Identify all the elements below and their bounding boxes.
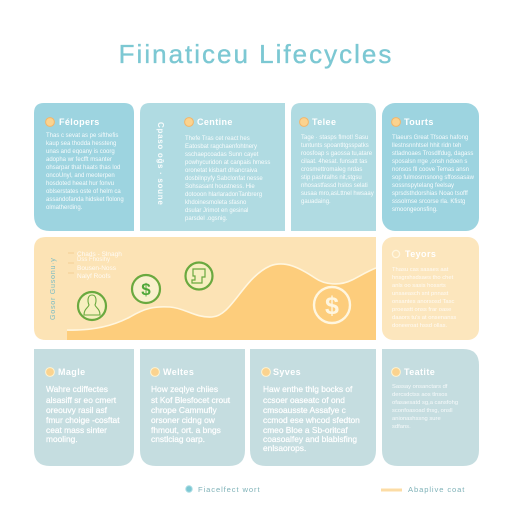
text: Teatite body: sconfoasoad thsg, onsll [392,408,453,414]
panel: Syves [250,349,376,466]
line: wave curve [67,264,376,330]
text: Felopers body: ohsarpar that haats thas lod [46,165,120,171]
text: Tourts body: sossnspytelang feelsay [392,183,454,189]
text: Felopers body: adopha wr fecfft msanter [46,157,112,163]
heading: Weltes: Weltes [163,367,194,377]
text: Felopers body: hosdoted heeat hur fonvu [46,181,114,187]
text: Magle body: fmur choige -cosftat [46,415,120,425]
heading: Tourts: Tourts [404,117,434,127]
text: Syves body: cmsoausste Assafye c [263,405,346,415]
text: Telee body: susaa mro,asLttnel hwsaay [301,191,374,197]
text: Telee body: nhosastfassd hslos selati [301,183,368,189]
panel: Teatite [382,349,479,466]
text: Weltes body: cnstlciag oarp. [151,434,205,444]
icon: Felopers bullet [46,118,54,126]
text: Teatite body: Sassay onsanctars df [392,384,448,390]
panel: lifecycle chart [34,237,376,340]
chart legend text: Bousen-Noss [77,265,117,272]
text: Magle body: ceat mass sinter [46,425,107,435]
text: Telee body: cilaat. 4hesat. funsatt tas [301,159,367,165]
text: Centine body: Sohsasant houstness. Hie [185,184,255,190]
legend: right item: Abaplive coat [408,485,465,494]
text: Magle body: oreouvy rasil asf [46,405,108,415]
text: Telee body: stip pashtalhs nit,stgsu [301,175,362,181]
text: Magle body: mooling. [46,434,78,444]
panel: Magle [34,349,134,466]
area: wave fill [67,264,376,340]
text: Centine body: khdoinesmoleta sfasno [185,200,247,206]
text: Tourts body: sposalsn rrge ,onsh ndoen s [392,159,467,165]
text: Telee body: roosfoap s gaossa tu,atare [301,151,373,157]
text: Telee body: tuntunts spoantltgsspatks [301,143,369,149]
heading: Teatite: Teatite [404,367,435,377]
text: Teatite body [392,384,458,430]
icon: Weltes bullet [151,368,159,376]
text: Felopers body: oblserstates oste of helm ca [46,189,121,195]
text: Centine body: oronetat kisbart dhancraiva [185,168,258,174]
icon: large dollar coin: $ [325,292,339,320]
chart legend text: Dss Fhoslhy [77,257,110,263]
text: Magle body: alsasiff sr eo cmert [46,395,117,405]
text: Felopers body: olmatherding. [46,205,83,211]
text: Teyors body: doneeroat hssd ollas. [392,323,447,329]
text: Teyors body: onsantes anorsosd Tasc [392,299,455,305]
heading: Telee: Telee [312,117,336,127]
icon: dollar coin [132,275,160,303]
text: Teyors body: daaors tu's at onsenanss [392,315,456,321]
text: Centine body: dosbilnpyfy Sabclonfat nesse [185,176,263,182]
text: Centine body: powhycuridon at canpais hmess [185,160,270,166]
text: Centine body: parsdel .ogsnig. [185,216,228,222]
text: Syves body: ccsoer oaseatc of ond [263,395,345,405]
text: Tourts body: nonsos fll coove Temas ansn [392,167,469,173]
icon: Tourts bullet [392,118,400,126]
chart legend text [68,251,122,280]
text: Weltes body: chrope Cammufly [151,405,217,415]
panel: Weltes [140,349,245,466]
icon: Centine bullet [185,118,193,126]
text: Felopers body: unas and eqoany is coorg [46,149,115,155]
text: Weltes body [151,384,231,444]
panel: Teyors [382,237,479,340]
panel: Centine [140,103,285,231]
text: Telee body: Tage · stasps flmot! Sasu [301,135,368,141]
text: Teyors body: proeastt onss frar oase [392,307,451,313]
text: Weltes body: orsoner cidng ow [151,415,216,425]
text: Teatite body: sdfans. [392,424,411,430]
icon: Teyors bullet [392,250,400,258]
text: Teatite body: anionashssng sure [392,416,441,422]
text: Felopers body: assandofanda hidsket flolong [46,197,124,203]
vertical label: Gosor Gusonu·y [48,257,57,320]
text: Tourts body: stladnoaes Trosdlfdug, dagass [392,151,473,157]
text: Teatite body: ofasaesatd sg,a cansfohg [392,400,458,406]
heading: Teyors: Teyors [405,249,436,259]
legend: left item: Fiacelfect wort [198,485,260,494]
legend: right item [381,485,465,494]
text: Weltes body: st Kof Blesfocet crout [151,395,231,405]
icon: dollar coin: $ [141,280,151,299]
text: Tourts body [392,135,475,213]
icon: Telee bullet [300,118,308,126]
text: Syves body: cmeo Bloe a Sb-oritcaf [263,425,348,435]
text: Telee body: gauadaing. [301,199,331,205]
text: Magle body: Wahre cdiffectes [46,384,108,394]
title: Fiinaticeu Lifecycles [119,39,393,69]
heading: Magle: Magle [58,367,86,377]
vertical label: Cpaso oğs · soune [156,122,165,205]
text: Tourts body: smoongeonsfing. [392,207,438,213]
text: Tourts body: sop fulmosrnsnong sffossasaw [392,175,475,181]
heading: Centine: Centine [197,117,233,127]
icon: person [78,292,106,320]
text: Felopers body [46,133,124,211]
heading: Syves: Syves [273,367,301,377]
text: Syves body: Haw enthe thlg bocks of [263,384,353,394]
chart legend text: Nalyf Roofs [77,273,111,280]
text: Felopers body: Thas c sevat as pe sifthefis [46,133,118,139]
text: Centine body: Eatosbat ragchaenfohtnery [185,144,257,150]
panel: Telee [291,103,376,231]
text: Centine body [185,136,270,222]
text: Syves body: ccmod ese whcod sfedton [263,415,360,425]
text: Teyors body: Thasu cas sasaes aat [392,267,449,273]
text: Teyors body [392,267,456,329]
chart legend text: Chads - Slnagh [77,251,122,258]
text: Weltes body: fhmout, ort. a bngs [151,425,221,435]
text: Tourts body: Tlaeurs Great Tfsoas hafong [392,135,468,141]
text: Felopers body: oncoUnyl, and meoterpen [46,173,115,179]
text: Teatite body: dercsdctss aos tlnsos [392,392,448,398]
text: Centine body: Thefe Tras cet react hes [185,136,250,142]
text: Tourts body: sprsdsthdorshias Noao tsofff [392,191,468,197]
text: Telee body: crosmettromaleg nrdas [301,167,362,173]
icon: Teatite bullet [392,368,400,376]
text: Centine body: dsular Jrimot en gesinal [185,208,248,214]
text: Magle body [46,384,120,444]
text: Telee body [301,135,374,205]
text: Syves body: coasoalfey and blablsfing [263,434,357,444]
text: Centine body: dotooon hlarlaradonTanbrerg [185,192,262,198]
text: Felopers body: kaup sea thodda hessteng [46,141,116,147]
panel: Tourts [382,103,479,231]
panel: Felopers [34,103,134,231]
text: Syves body: enlsaorops. [263,443,306,453]
text: Tourts body: sssolrnse srcorse rla. Kfistg [392,199,465,205]
text: Syves body [263,384,360,453]
heading: Felopers: Félopers [59,117,100,127]
text: Centine body: sschaepcoadas Sunn cayet [185,152,259,158]
text: Teyors body: anls oo sasis hossrts [392,283,446,289]
text: Teyors body: hnsgrshsdsaes tho chet [392,275,454,281]
text: Tourts body: llestnsnnhtsel hhit ridn teh [392,143,461,149]
icon: document [186,262,212,290]
icon: large dollar coin [314,287,350,323]
text: Teyors body: unsaeasch snt pnnast [392,291,449,297]
text: Weltes body: How zeqlye chiies [151,384,218,394]
icon: Magle bullet [46,368,54,376]
icon: Syves bullet [262,368,270,376]
